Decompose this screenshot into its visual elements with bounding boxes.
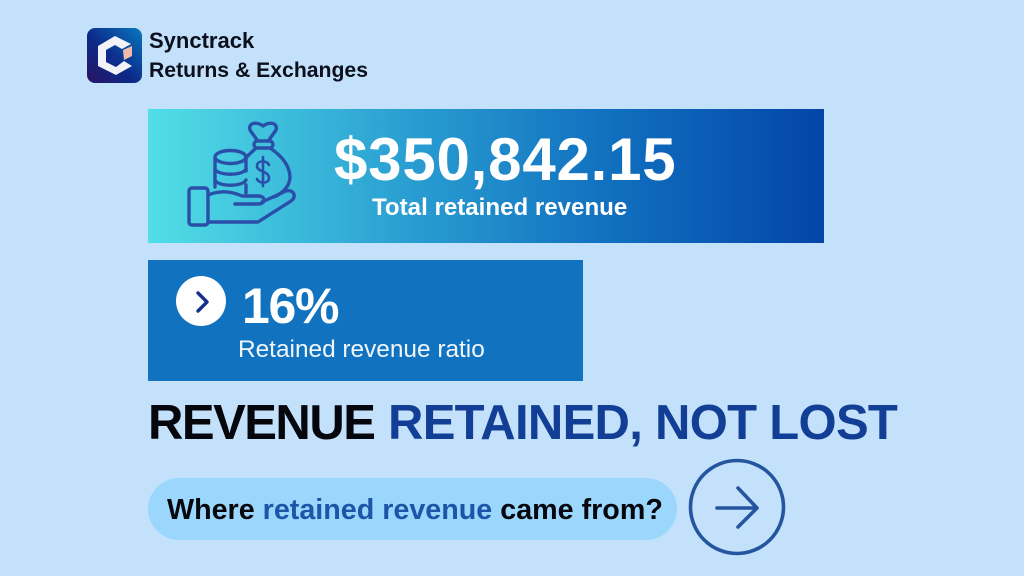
label: retained revenue ratio: Retained revenue ratio [238,336,485,363]
panel: retained revenue ratio [148,260,583,381]
panel: total retained revenue [148,109,824,243]
logo icon [87,28,142,83]
headline: REVENUE RETAINED, NOT LOST [148,396,897,450]
metric: total retained revenue value: $350,842.15 [334,126,676,193]
icon: chevron circle [176,276,226,326]
icon: money bag in hand [187,122,296,227]
label: total retained revenue: Total retained revenue [372,194,627,221]
brand subtitle: Returns & Exchanges [149,59,368,82]
pill: question [148,478,677,540]
icon: arrow circle [688,458,786,556]
brand name: Synctrack [149,28,254,53]
question text: Where retained revenue came from? [167,494,663,526]
metric: 16%: 16% [242,278,338,334]
